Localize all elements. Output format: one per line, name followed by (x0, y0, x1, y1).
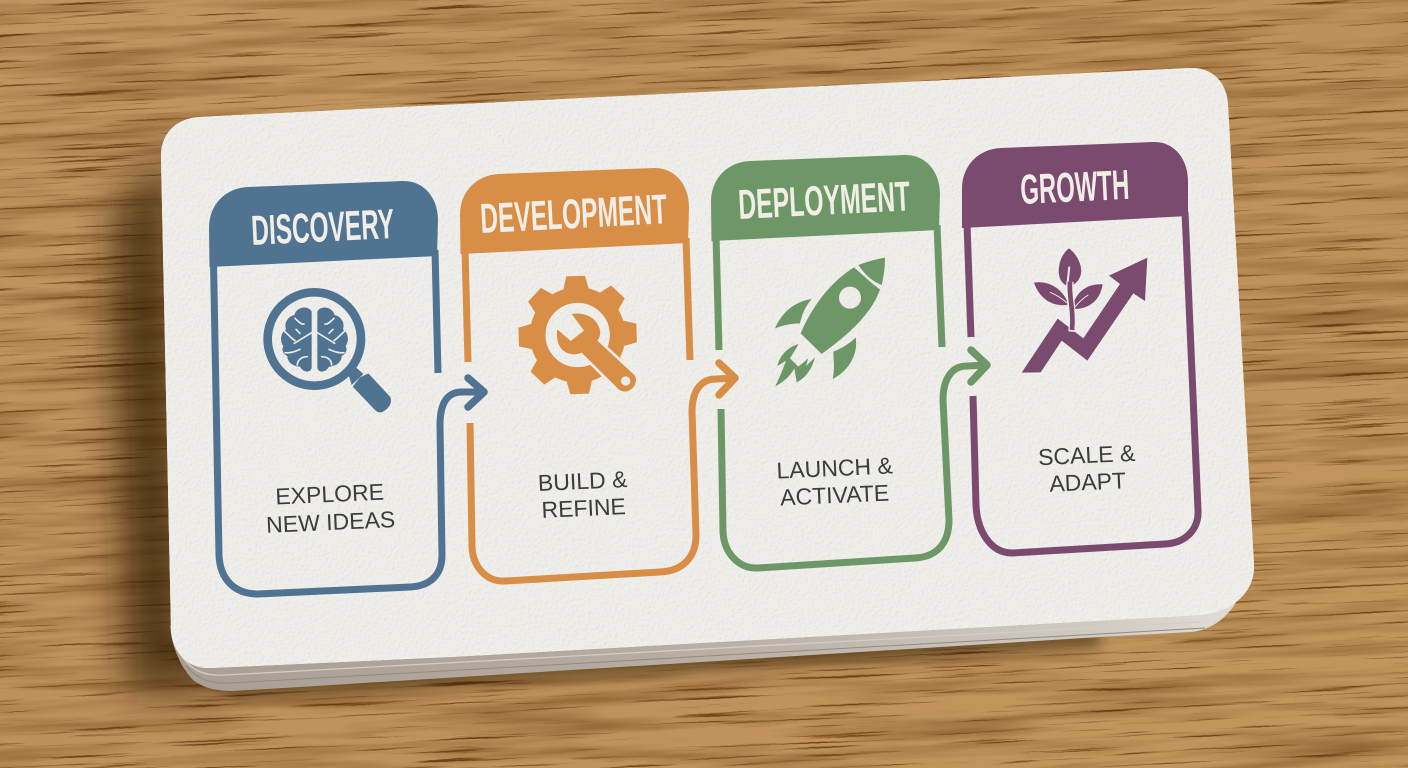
deployment label: ACTIVATE (780, 480, 890, 510)
panel: deployment (711, 155, 987, 568)
card face (161, 68, 1254, 668)
discovery label: NEW IDEAS (266, 506, 396, 538)
growth label: ADAPT (1049, 467, 1127, 497)
discovery outline and arrow (214, 250, 484, 594)
deployment header (711, 155, 940, 241)
development outline and arrow (465, 238, 735, 581)
growth header (962, 142, 1188, 228)
discovery label: EXPLORE (275, 479, 384, 509)
discovery header (209, 181, 438, 267)
discovery label (266, 479, 396, 538)
deployment label: LAUNCH & (776, 452, 893, 484)
development label (537, 466, 628, 523)
growth title: GROWTH (1019, 161, 1130, 213)
growth label (1038, 440, 1136, 497)
card shadow on table (112, 150, 1100, 700)
deployment outline and arrow (716, 225, 987, 568)
development label: REFINE (541, 493, 626, 523)
icon: gear with wrench (517, 274, 639, 396)
deployment label (776, 452, 893, 510)
development header (460, 168, 689, 254)
icon: plant and rising arrow (1022, 248, 1147, 373)
deployment title: DEPLOYMENT (737, 172, 911, 228)
panel: discovery (209, 181, 484, 594)
growth outline (967, 212, 1198, 553)
panel: growth (962, 142, 1198, 553)
icon: rocket (775, 258, 885, 387)
growth label: SCALE & (1038, 440, 1136, 470)
icon: magnifier with brain (268, 292, 391, 412)
card stack edge (170, 580, 1250, 691)
development title: DEVELOPMENT (479, 185, 668, 242)
panel: development (460, 168, 735, 581)
discovery title: DISCOVERY (250, 200, 395, 254)
development label: BUILD & (537, 466, 628, 496)
